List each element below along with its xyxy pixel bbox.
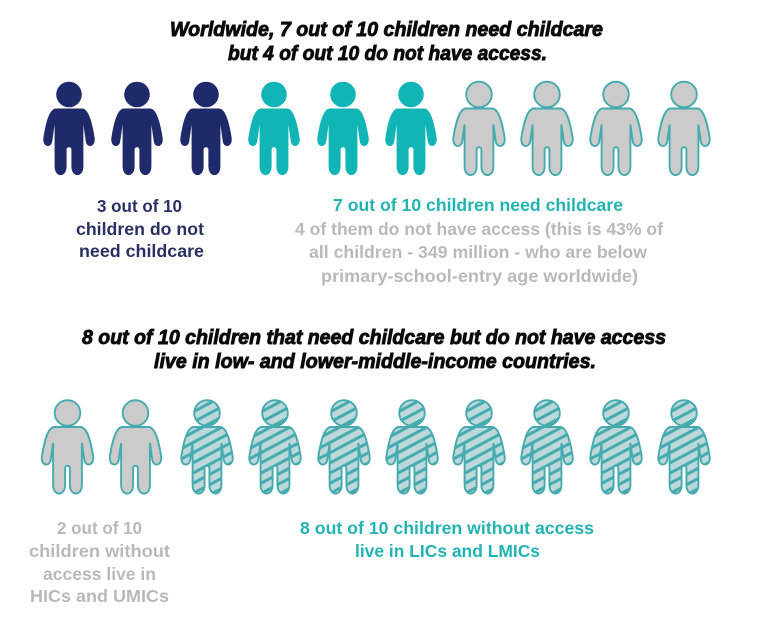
label: 8 out of 10 in LICs and LMICs: live in LICs and LMICs <box>355 541 540 561</box>
title: worldwide childcare need <box>170 19 603 65</box>
label: 7 out of 10 need childcare: 7 out of 10 children need childcare <box>333 195 623 215</box>
title: low- and lower-middle-income countries: live in low- and lower-middle-income countries. <box>154 351 596 373</box>
title: low- and lower-middle-income countries <box>82 327 666 373</box>
label: 3 out of 10 do not need childcare: children do not <box>76 219 204 239</box>
pictogram: 3 navy children who do not need childcare <box>43 82 232 175</box>
pictogram: 8 hatched children in LICs and LMICs <box>181 400 710 494</box>
label: 8 out of 10 in LICs and LMICs <box>300 518 594 561</box>
text block: 4 of them do not have access: all children - 349 million - who are below <box>309 242 647 262</box>
label: 2 out of 10 in HICs and UMICs: children without <box>29 541 170 561</box>
pictogram: 2 grey children in HICs and UMICs <box>42 400 161 494</box>
label: 3 out of 10 do not need childcare <box>76 196 204 261</box>
label: 2 out of 10 in HICs and UMICs: HICs and UMICs <box>30 586 169 606</box>
label: 2 out of 10 in HICs and UMICs: access live in <box>43 564 156 584</box>
title: worldwide childcare need: Worldwide, 7 out of 10 children need childcare <box>170 19 603 41</box>
text block: 4 of them do not have access: 4 of them do not have access (this is 43% of <box>295 219 663 239</box>
pictogram: 3 teal children who need childcare and have access <box>248 82 437 175</box>
text block: 4 of them do not have access: primary-school-entry age worldwide) <box>321 266 638 286</box>
label: 2 out of 10 in HICs and UMICs <box>29 518 170 606</box>
label: 3 out of 10 do not need childcare: 3 out of 10 <box>97 196 182 216</box>
label: 3 out of 10 do not need childcare: need childcare <box>79 241 204 261</box>
label: 2 out of 10 in HICs and UMICs: 2 out of 10 <box>57 518 142 538</box>
pictogram: 4 grey children who need childcare without access <box>453 82 710 175</box>
title: low- and lower-middle-income countries: 8 out of 10 children that need childcare but do not have access <box>82 327 666 349</box>
text block: 4 of them do not have access <box>295 219 663 286</box>
title: worldwide childcare need: but 4 of out 10 do not have access. <box>228 43 547 65</box>
label: 8 out of 10 in LICs and LMICs: 8 out of 10 children without access <box>300 518 594 538</box>
